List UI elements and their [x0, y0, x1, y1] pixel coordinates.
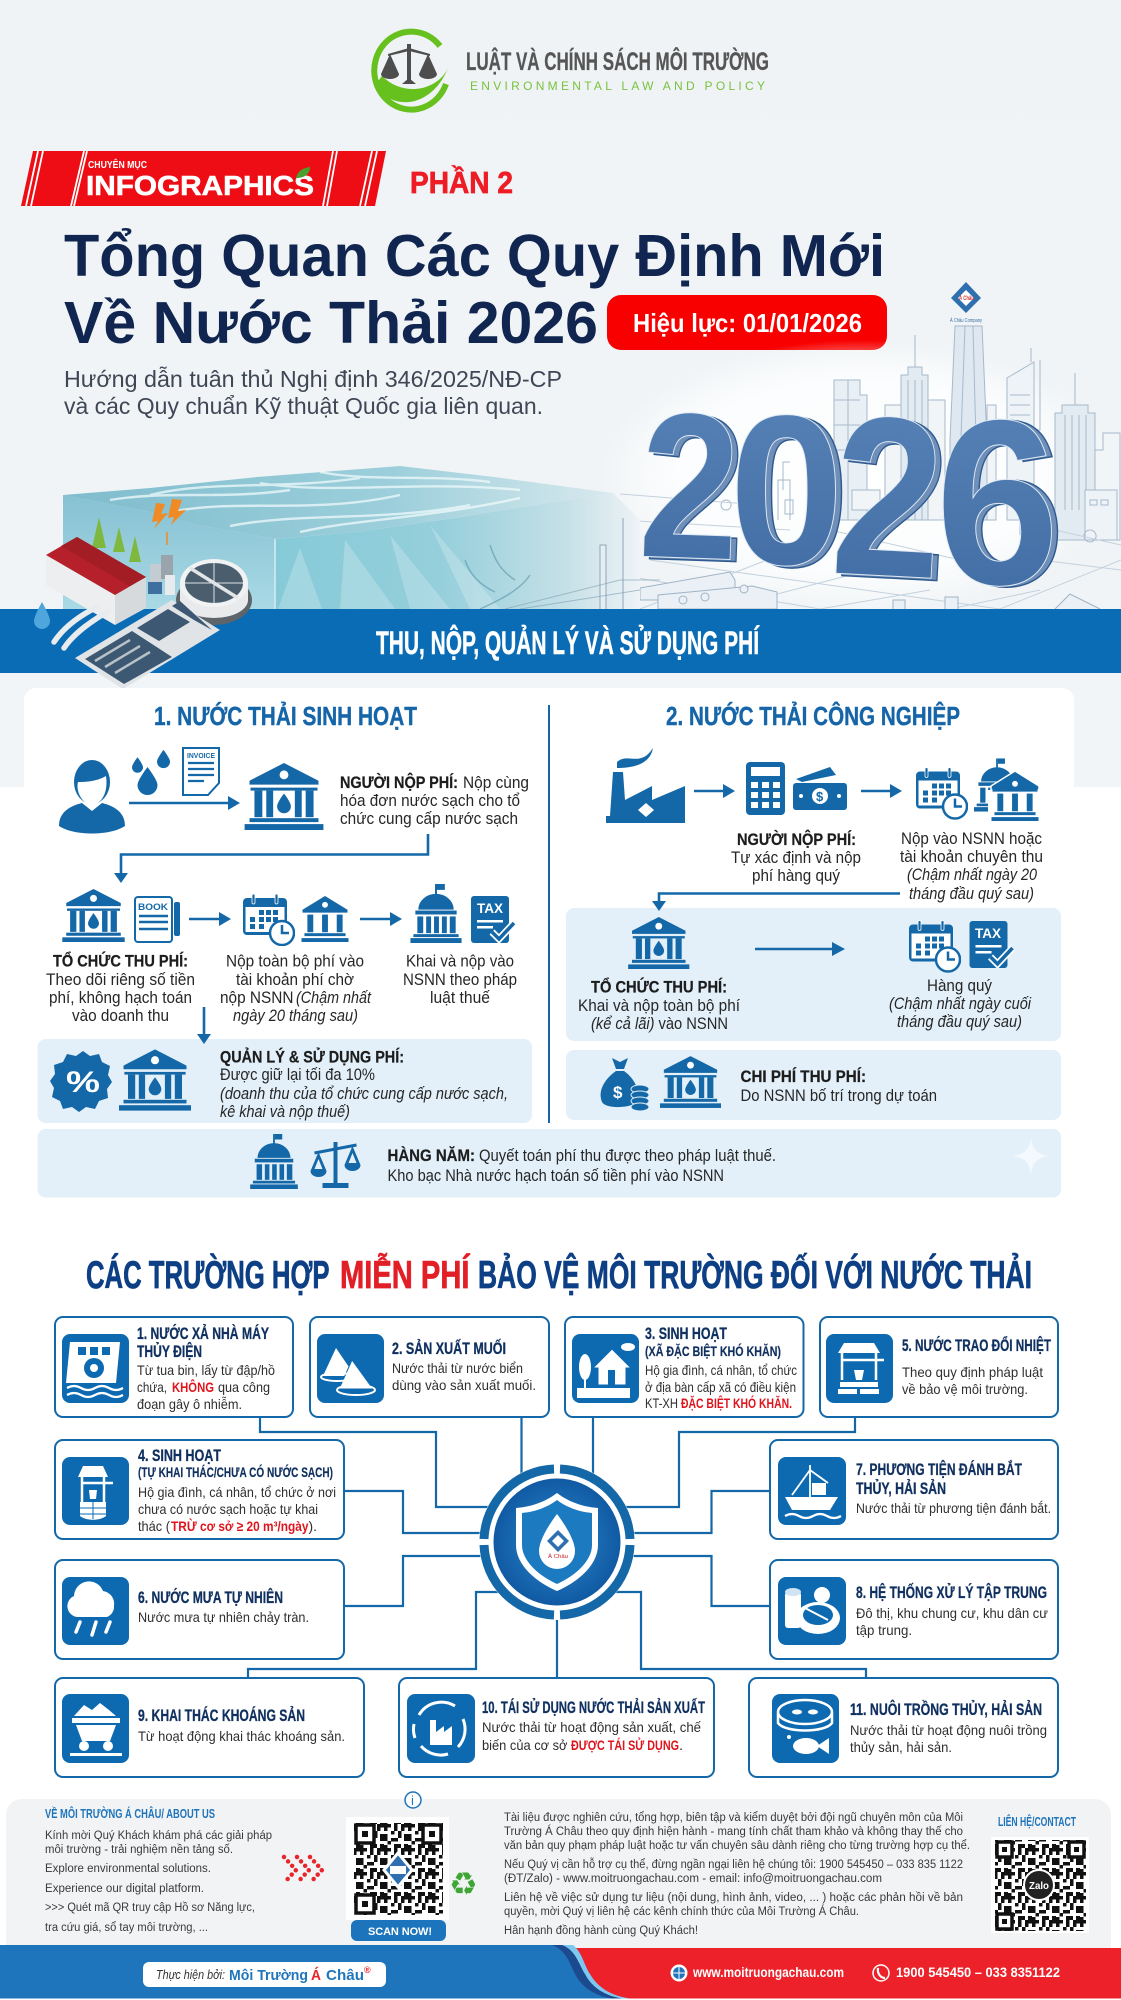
text: pay into account: Nộp toàn bộ phí vào: [226, 952, 364, 970]
card 1: hydropower: THỦY ĐIỆN: [137, 1342, 202, 1361]
text: declare tax: NSNN theo pháp: [403, 970, 517, 989]
banner: chuyên mục infographics: INFOGRAPHICS: [86, 170, 314, 201]
scan now button: [351, 1920, 446, 1941]
icon: invoice: [183, 748, 219, 795]
icon: brick well: [826, 1334, 893, 1403]
panel: quarterly declaration: vào NSNN: [658, 1014, 728, 1033]
icon: mine cart: [62, 1694, 129, 1763]
card 11: aquaculture: Nước thải từ hoạt động nuôi trồng: [850, 1722, 1047, 1738]
panel: fees: [24, 688, 1074, 1205]
disclaimer: quyền, mời Quý vị liên hệ các kênh chính thức của Môi Trường Á Châu.: [504, 1905, 859, 1918]
card 3: especially disadvantaged communes: Hộ gia đình, cá nhân, tổ chức: [645, 1362, 797, 1378]
card 8: central treatment: tập trung.: [856, 1622, 912, 1638]
2026 large numerals: 0: [735, 373, 850, 612]
title: Tổng Quan Các Quy Định Mới: [64, 223, 885, 289]
text: pay to state budget: Nộp vào NSNN hoặc: [901, 829, 1042, 848]
banner: chuyên mục infographics: CHUYÊN MỤC: [88, 158, 147, 171]
arrow: [189, 912, 231, 926]
card 5: heat exchange water: về bảo vệ môi trường.: [902, 1381, 1028, 1397]
card 4: self-extraction: [55, 1440, 344, 1539]
credit pill: Châu: [326, 1967, 364, 1984]
icon: invoice: INVOICE: [187, 753, 215, 760]
arrow: [694, 784, 735, 798]
icon: bank with drop: [62, 889, 125, 942]
card 2: salt production: [310, 1317, 549, 1417]
2026 large numerals: 2: [642, 372, 750, 607]
card 3: especially disadvantaged communes: (XÃ ĐẶC BIỆT KHÓ KHĂN): [645, 1342, 781, 1359]
text: declare tax: luật thuế: [430, 988, 490, 1007]
text: pay into account: tài khoản phí chờ: [236, 970, 354, 989]
effective date badge: Hiệu lực: 01/01/2026: [633, 308, 862, 338]
2026 large numerals: 6: [939, 371, 1067, 637]
card 4: self-extraction: thác (: [138, 1518, 170, 1534]
icon: house: [572, 1334, 639, 1403]
website: [670, 1964, 844, 1982]
central emblem: shield: Á Châu: [548, 1553, 568, 1560]
arrow: [360, 912, 402, 926]
about us: tra cứu giá, sổ tay môi trường, ...: [45, 1922, 208, 1934]
icon: rain cloud: [62, 1577, 129, 1645]
card 10: reuse: .: [679, 1737, 683, 1753]
text: pay to state budget: tháng đầu quý sau): [909, 884, 1034, 903]
text: collecting organisation: TỔ CHỨC THU PHÍ:: [53, 952, 188, 970]
card 2: salt production: dùng vào sản xuất muối.: [392, 1377, 536, 1393]
bottom contact bar: [0, 1945, 1121, 1998]
card 1: hydropower: đoạn gây ô nhiễm.: [137, 1396, 242, 1412]
logo: Á Châu company: Á Châu: [959, 295, 974, 302]
text: collecting organisation: [46, 952, 195, 1025]
card 1: hydropower: [55, 1317, 293, 1417]
text: pay to state budget: (Chậm nhất ngày 20: [907, 865, 1037, 884]
illustration: factory floor grid: [620, 494, 1121, 609]
panel: annual settlement: HÀNG NĂM:: [388, 1146, 475, 1165]
QR code: company profile: [346, 1817, 449, 1920]
card 5: heat exchange water: [820, 1317, 1058, 1417]
arrow: [114, 834, 428, 883]
text: collecting organisation: Theo dõi riêng số tiền: [46, 970, 195, 989]
connectors: [248, 1417, 866, 1678]
card 9: mining: [55, 1678, 364, 1777]
logo: Á Châu company: [950, 282, 982, 324]
about us: [45, 1806, 272, 1934]
icon: capitol: [410, 884, 462, 943]
QR code: Zalo: Zalo: [1029, 1881, 1049, 1892]
illustration: city skyline: [600, 326, 1121, 610]
text: fee payer: NGƯỜI NỘP PHÍ:: [340, 773, 458, 792]
card 4: self-extraction: 4. SINH HOẠT: [138, 1447, 221, 1465]
illustration: water block: [63, 466, 660, 609]
card 1: hydropower: chứa,: [137, 1379, 167, 1395]
icon: treatment tanks: [778, 1577, 846, 1645]
card 3: especially disadvantaged communes: KT-XH: [645, 1395, 678, 1411]
2026 large numerals: 2: [832, 371, 956, 630]
card 1: hydropower: Từ tua bin, lấy từ đập/hồ: [137, 1362, 275, 1378]
illustration: treatment plant: [34, 499, 252, 689]
text: collecting organisation: vào doanh thu: [72, 1006, 169, 1025]
icon: money: [793, 767, 847, 810]
about us: >>> Quét mã QR truy cập Hồ sơ Năng lực,: [45, 1902, 255, 1914]
panel: quarterly declaration: TỔ CHỨC THU PHÍ:: [591, 978, 727, 996]
card 11: aquaculture: thủy sản, hải sản.: [850, 1739, 952, 1755]
heading: industrial wastewater: 2. NƯỚC THẢI CÔNG NGHIỆP: [666, 701, 960, 731]
text: industrial fee payer: phí hàng quý: [752, 866, 840, 885]
text: pay into account: nộp NSNN: [220, 988, 294, 1007]
icon: fish pond: [772, 1694, 839, 1763]
text: declare tax: Khai và nộp vào: [406, 952, 514, 970]
disclaimer: văn bản quy phạm pháp luật hoặc tư vấn chuyên sâu dành riêng cho từng trường hợp cụ thể.: [504, 1840, 970, 1852]
text: fee payer: hóa đơn nước sạch cho tổ: [340, 791, 520, 810]
text: pay into account: (Chậm nhất: [296, 988, 372, 1007]
icon: water drops: [132, 750, 170, 795]
card 7: fishing vessels: THỦY, HẢI SẢN: [856, 1479, 946, 1498]
website: www.moitruongachau.com: [692, 1965, 844, 1980]
credit pill: Á: [311, 1967, 321, 1984]
icon: round well: [62, 1457, 129, 1525]
effective date badge: [607, 295, 887, 350]
card 8: central treatment: Đô thị, khu chung cư, khu dân cư: [856, 1605, 1048, 1621]
text: pay into account: ngày 20 tháng sau): [233, 1006, 358, 1025]
heading: exemption cases: CÁC TRƯỜNG HỢP: [86, 1253, 330, 1297]
icon: salt piles: [317, 1334, 384, 1403]
2026 large numerals: [636, 368, 1067, 637]
card 3: especially disadvantaged communes: ở địa bàn cấp xã có điều kiện: [645, 1379, 796, 1395]
logo: environmental law and policy: ENVIRONMENTAL LAW AND POLICY: [470, 79, 765, 93]
card 10: reuse: Nước thải từ hoạt động sản xuất, chế: [482, 1719, 701, 1735]
arrow: [129, 796, 240, 810]
card 2: salt production: 2. SẢN XUẤT MUỐI: [392, 1338, 506, 1358]
panel: collection cost: [566, 1050, 1061, 1120]
card 10: reuse: biến của cơ sở: [482, 1737, 568, 1753]
card 1: hydropower: qua công: [218, 1379, 270, 1395]
about us: Kính mời Quý Khách khám phá các giải pháp: [45, 1830, 272, 1842]
icon: info: i: [411, 1793, 414, 1808]
panel: annual settlement: Kho bạc Nhà nước hạch toán số tiền phí vào NSNN: [388, 1166, 724, 1185]
2026 large numerals: 6: [933, 370, 1061, 636]
icon: bank: [302, 896, 348, 942]
disclaimer: Trường Á Châu theo quy định hiện hành - mang tính chất tham khảo và không thay thế cho: [504, 1825, 963, 1838]
disclaimer: Nếu Quý vị cần hỗ trợ cụ thể, đừng ngần ngại liên hệ chúng tôi: 1900 545450 – 033 835 1122: [504, 1858, 963, 1871]
card 9: mining: 9. KHAI THÁC KHOÁNG SẢN: [138, 1706, 305, 1725]
icon: fishing boat: [778, 1457, 846, 1525]
credit pill: Thực hiện bởi:: [156, 1967, 225, 1982]
card 5: heat exchange water: 5. NƯỚC TRAO ĐỔI NHIỆT: [902, 1336, 1051, 1355]
text: pay to state budget: tài khoản chuyên thu: [900, 847, 1043, 866]
panel: quarterly declaration: Khai và nộp toàn bộ phí: [578, 996, 740, 1015]
card 1: hydropower: 1. NƯỚC XẢ NHÀ MÁY: [137, 1324, 269, 1343]
icon: recycling factory: [407, 1694, 475, 1763]
card 3: especially disadvantaged communes: [565, 1317, 804, 1417]
disclaimer: Liên hệ về việc sử dụng tư liệu (nội dung, hình ảnh, video, ... ) hoặc các phản hồi về bản: [504, 1892, 963, 1904]
disclaimer: (ĐT/Zalo) - www.moitruongachau.com - email: info@moitruongachau.com: [504, 1873, 882, 1885]
card 1: hydropower: KHÔNG: [172, 1378, 214, 1395]
icon: bank with drop: [245, 763, 323, 830]
card 4: self-extraction: (TỰ KHAI THÁC/CHƯA CÓ NƯỚC SẠCH): [138, 1463, 333, 1480]
icon: book: BOOK: [138, 902, 168, 913]
text: declare tax: [403, 952, 517, 1007]
text: fee payer: Nộp cùng: [463, 773, 529, 792]
panel: annual settlement: [38, 1129, 1061, 1198]
logo: environmental law and policy: [374, 32, 769, 110]
card 4: self-extraction: Hộ gia đình, cá nhân, tổ chức ở nơi: [138, 1484, 336, 1500]
card 9: mining: Từ hoạt động khai thác khoáng sản.: [138, 1728, 345, 1744]
card 7: fishing vessels: 7. PHƯƠNG TIỆN ĐÁNH BẮT: [856, 1460, 1022, 1479]
footer panel: [6, 1792, 1111, 1964]
panel: fee management: (doanh thu của tổ chức cung cấp nước sạch,: [220, 1084, 508, 1103]
subtitle: Hướng dẫn tuân thủ Nghị định 346/2025/NĐ-CP: [64, 366, 562, 392]
card 10: reuse: [399, 1678, 714, 1777]
panel: collection cost: $: [613, 1083, 623, 1102]
card 11: aquaculture: [749, 1678, 1058, 1777]
section band: THU, NỘP, QUẢN LÝ VÀ SỬ DỤNG PHÍ: [376, 625, 760, 661]
card 2: salt production: Nước thải từ nước biển: [392, 1360, 523, 1376]
scan now button: SCAN NOW!: [368, 1926, 432, 1938]
icon: person: [59, 760, 125, 834]
panel: fee management: QUẢN LÝ & SỬ DỤNG PHÍ:: [220, 1048, 404, 1066]
icon: book: [135, 897, 180, 942]
credit pill: Môi Trường: [229, 1967, 308, 1984]
card 11: aquaculture: 11. NUÔI TRỒNG THỦY, HẢI SẢN: [850, 1700, 1042, 1719]
arrow: [652, 894, 900, 911]
text: pay into account: [220, 952, 372, 1025]
disclaimer: Tài liệu được nghiên cứu, tổng hợp, biên tập và kiểm duyệt bởi đội ngũ chuyên môn của Môi: [504, 1812, 963, 1824]
arrow: [861, 784, 902, 798]
text: industrial fee payer: Tự xác định và nộp: [731, 848, 861, 867]
card 4: self-extraction: TRỪ cơ sở ≥ 20 m³/ngày: [171, 1517, 309, 1534]
icon: capitol and bank: [974, 758, 1039, 821]
panel: fee management: [38, 1039, 532, 1123]
card 6: natural rainwater: 6. NƯỚC MƯA TỰ NHIÊN: [138, 1588, 283, 1607]
section band: [0, 609, 1121, 673]
card 6: natural rainwater: [55, 1560, 344, 1659]
card 4: self-extraction: chưa có nước sạch hoặc tự khai: [138, 1501, 318, 1517]
icon: recycle: ♻: [449, 1865, 478, 1903]
credit pill: ®: [364, 1965, 371, 1975]
about us: môi trường - trải nghiệm nền tảng số.: [45, 1844, 233, 1856]
part label: PHẦN 2: [410, 165, 513, 200]
contact heading: LIÊN HỆ/CONTACT: [998, 1814, 1076, 1829]
card 7: fishing vessels: Nước thải từ phương tiện đánh bắt.: [856, 1500, 1051, 1516]
card 6: natural rainwater: Nước mưa tự nhiên chảy tràn.: [138, 1609, 309, 1625]
panel: quarterly declaration: TAX: [975, 925, 1002, 941]
panel: quarterly declaration: Hàng quý: [927, 976, 992, 995]
card 10: reuse: 10. TÁI SỬ DỤNG NƯỚC THẢI SẢN XUẤT: [482, 1698, 705, 1717]
disclaimer: Hân hạnh đồng hành cùng Quý Khách!: [504, 1925, 698, 1937]
panel: quarterly declaration: (kể cả lãi): [591, 1014, 654, 1033]
disclaimer: [504, 1812, 970, 1937]
icon: red chevrons: [284, 1857, 322, 1883]
panel: quarterly declaration: [566, 908, 1061, 1041]
icon: hydropower dam: [62, 1334, 129, 1403]
subtitle: và các Quy chuẩn Kỹ thuật Quốc gia liên quan.: [64, 393, 543, 419]
icon: factory: [606, 748, 685, 823]
card 4: self-extraction: ).: [308, 1518, 317, 1534]
title: [64, 223, 885, 356]
card 3: especially disadvantaged communes: 3. SINH HOẠT: [645, 1325, 727, 1343]
icon: info: [405, 1792, 421, 1808]
title: Về Nước Thải 2026: [64, 290, 598, 356]
heading: exemption cases: [86, 1252, 1032, 1297]
text: pay to state budget: [900, 829, 1043, 903]
about us: VỀ MÔI TRƯỜNG Á CHÂU/ ABOUT US: [45, 1806, 215, 1821]
card 3: especially disadvantaged communes: ĐẶC BIỆT KHÓ KHĂN.: [681, 1394, 792, 1411]
banner: chuyên mục infographics: [21, 151, 386, 206]
icon: tax document: [471, 896, 514, 943]
logo: environmental law and policy: LUẬT VÀ CHÍNH SÁCH MÔI TRƯỜNG: [466, 46, 769, 76]
phone: 1900 545450 – 033 8351122: [896, 1965, 1060, 1980]
icon: calendar: [243, 894, 294, 945]
central emblem: shield: [479, 1464, 635, 1620]
heading: household wastewater: 1. NƯỚC THẢI SINH HOẠT: [154, 701, 417, 731]
card 7: fishing vessels: [770, 1440, 1058, 1539]
icon: money: $: [816, 789, 824, 804]
2026 large numerals: 0: [729, 371, 844, 610]
about us: Explore environmental solutions.: [45, 1863, 211, 1875]
text: industrial fee payer: NGƯỜI NỘP PHÍ:: [737, 830, 856, 849]
panel: collection cost: Do NSNN bố trí trong dự toán: [740, 1086, 937, 1105]
text: fee payer: chức cung cấp nước sạch: [340, 809, 518, 828]
logo: Á Châu company: Á Châu Company: [950, 317, 982, 324]
card 10: reuse: ĐƯỢC TÁI SỬ DỤNG: [571, 1736, 679, 1753]
panel: quarterly declaration: (Chậm nhất ngày cuối: [889, 994, 1032, 1013]
about us: Experience our digital platform.: [45, 1883, 204, 1895]
panel: fee management: %: [66, 1066, 100, 1099]
credit pill: [143, 1962, 386, 1987]
text: fee payer: [340, 773, 529, 828]
panel: fee management: Được giữ lại tối đa 10%: [220, 1065, 375, 1084]
card 8: central treatment: 8. HỆ THỐNG XỬ LÝ TẬP TRUNG: [856, 1582, 1047, 1602]
subtitle: [64, 366, 562, 419]
icon: calendar: [916, 768, 967, 818]
icon: tax document: TAX: [477, 900, 504, 916]
2026 large numerals: 2: [636, 369, 744, 605]
arrow: [197, 1007, 211, 1044]
card 8: central treatment: [770, 1560, 1058, 1659]
text: industrial fee payer: [731, 830, 861, 885]
panel: quarterly declaration: tháng đầu quý sau): [897, 1012, 1022, 1031]
QR code: Zalo: [991, 1837, 1089, 1933]
panel: fee management: kê khai và nộp thuế): [220, 1102, 350, 1121]
text: collecting organisation: phí, không hạch toán: [49, 988, 192, 1007]
panel: collection cost: CHI PHÍ THU PHÍ:: [740, 1067, 866, 1086]
icon: calculator: [746, 762, 785, 815]
panel: annual settlement: Quyết toán phí thu được theo pháp luật thuế.: [479, 1146, 776, 1165]
heading: exemption cases: MIỄN PHÍ: [340, 1253, 470, 1297]
2026 large numerals: 2: [827, 368, 950, 628]
card 5: heat exchange water: Theo quy định pháp luật: [902, 1364, 1043, 1380]
